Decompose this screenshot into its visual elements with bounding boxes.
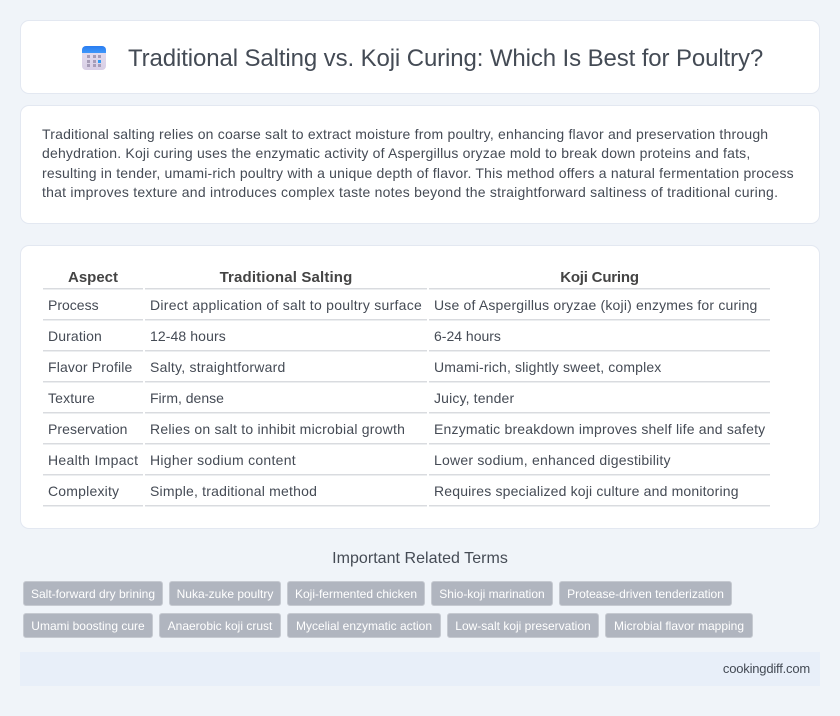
row: duration: Duration [48, 328, 102, 344]
row: complexity: Simple, traditional method [150, 483, 317, 499]
panel: comparison table [20, 245, 820, 529]
row: complexity [48, 483, 739, 499]
row: texture: Texture [48, 390, 95, 406]
tag list: related terms [23, 581, 753, 638]
tag list: related terms: Microbial flavor mapping [614, 619, 744, 633]
row: flavor profile: Umami-rich, slightly sweet, complex [434, 359, 661, 375]
row: health impact [48, 452, 671, 468]
row: preservation [48, 421, 766, 437]
row: preservation: Relies on salt to inhibit microbial growth [150, 421, 405, 437]
row: duration: 6-24 hours [434, 328, 501, 344]
tag list: related terms: Salt-forward dry brining [31, 587, 155, 601]
footer source text: cookingdiff.com [723, 661, 810, 676]
text: introduction paragraph: dehydration. Koji curing uses the enzymatic activity of Aspergillus oryzae mold to break down proteins and fats, [42, 145, 750, 161]
row: health impact: Higher sodium content [150, 452, 296, 468]
tag list: related terms: Low-salt koji preservation [455, 619, 591, 633]
row: complexity: Requires specialized koji culture and monitoring [434, 483, 739, 499]
row: texture [48, 390, 514, 406]
tag list: related terms: Nuka-zuke poultry [177, 587, 273, 601]
text: introduction paragraph: Traditional salting relies on coarse salt to extract moisture from poultry, enhancing flavor and preservation through [42, 126, 768, 142]
icon: calendar [82, 46, 106, 70]
text: introduction paragraph: that improves texture and introduces complex taste notes beyond the straightforward saltiness of traditional curing. [42, 184, 778, 200]
heading: related terms: Important Related Terms [332, 550, 508, 567]
footer [20, 652, 820, 686]
row: process: Direct application of salt to poultry surface [150, 297, 422, 313]
table header: Traditional Salting [220, 269, 352, 286]
panel: introduction [20, 105, 820, 224]
tag list: related terms: Umami boosting cure [31, 619, 145, 633]
panel: title header [20, 20, 820, 94]
table: comparison [43, 269, 770, 507]
tag list: related terms: Koji-fermented chicken [295, 587, 417, 601]
tag list: related terms: Shio-koji marination [439, 587, 545, 601]
row: flavor profile: Flavor Profile [48, 359, 132, 375]
row: health impact: Health Impact [48, 452, 138, 468]
row: texture: Firm, dense [150, 390, 224, 406]
row: preservation: Enzymatic breakdown improves shelf life and safety [434, 421, 765, 437]
text: introduction paragraph [42, 126, 794, 200]
text: introduction paragraph: resulting in tender, umami-rich poultry with a unique depth of flavor. This method offers a natural fermentation process [42, 165, 794, 181]
title: Traditional Salting vs. Koji Curing: Which Is Best for Poultry? [128, 45, 763, 72]
row: duration [48, 328, 501, 344]
tag list: related terms: Mycelial enzymatic action [296, 619, 432, 633]
tag list: related terms: Anaerobic koji crust [168, 619, 272, 633]
row: process: Use of Aspergillus oryzae (koji) enzymes for curing [434, 297, 758, 313]
table header [68, 269, 639, 286]
row: complexity: Complexity [48, 483, 119, 499]
row: texture: Juicy, tender [434, 390, 514, 406]
row: process: Process [48, 297, 99, 313]
tag list: related terms: Protease-driven tenderization [567, 587, 724, 601]
row: process [48, 297, 758, 313]
row: preservation: Preservation [48, 421, 128, 437]
row: flavor profile: Salty, straightforward [150, 359, 286, 375]
row: flavor profile [48, 359, 661, 375]
table header: Koji Curing [560, 269, 639, 286]
row: health impact: Lower sodium, enhanced digestibility [434, 452, 671, 468]
table header: Aspect [68, 269, 118, 286]
row: duration: 12-48 hours [150, 328, 226, 344]
